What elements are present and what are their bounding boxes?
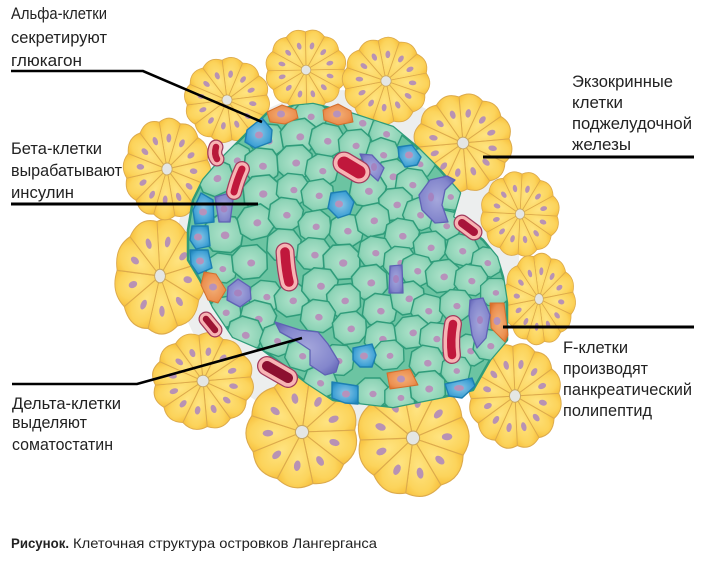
label: alpha cells: секретируют [11, 28, 107, 47]
leader line: alpha cells [11, 71, 262, 122]
label: delta cells: Дельта-клетки [12, 394, 121, 413]
label: F cells: F-клетки [563, 338, 628, 357]
label: F cells: производят [563, 359, 648, 378]
exocrine acini ring [101, 21, 579, 508]
caption: Клеточная структура островков Лангерганса [73, 535, 377, 551]
label: alpha cells: глюкагон [11, 51, 82, 70]
label: alpha cells: Альфа-клетки [11, 4, 107, 23]
tissue halo behind islet [175, 90, 519, 426]
label: exocrine cells [572, 72, 692, 154]
label: F cells: полипептид [563, 401, 652, 420]
label: exocrine cells: поджелудочной [572, 114, 692, 133]
alpha cells [190, 118, 475, 404]
label: F cells: панкреатический [563, 380, 692, 399]
label: F cells [563, 338, 692, 420]
leader line: beta cells [11, 202, 258, 206]
label: delta cells: соматостатин [12, 435, 113, 454]
label: exocrine cells: клетки [572, 93, 623, 112]
leader line: F cells [503, 326, 694, 328]
label: beta cells: инсулин [11, 183, 74, 202]
label: delta cells: выделяют [12, 413, 87, 432]
delta cells [215, 154, 490, 375]
label: alpha cells [11, 4, 107, 70]
islet of Langerhans [188, 99, 509, 411]
caption: Рисунок. [11, 535, 69, 551]
F cells [201, 104, 508, 389]
label: beta cells: Бета-клетки [11, 139, 102, 158]
leader line: delta cells [12, 338, 302, 384]
label: exocrine cells: железы [572, 135, 631, 154]
label: beta cells [11, 139, 122, 202]
label: exocrine cells: Экзокринные [572, 72, 673, 91]
label: delta cells [12, 394, 121, 454]
label: beta cells: вырабатывают [11, 161, 122, 180]
leader line: exocrine cells [483, 156, 694, 158]
beta cells [193, 99, 509, 411]
blood vessels [206, 147, 474, 378]
